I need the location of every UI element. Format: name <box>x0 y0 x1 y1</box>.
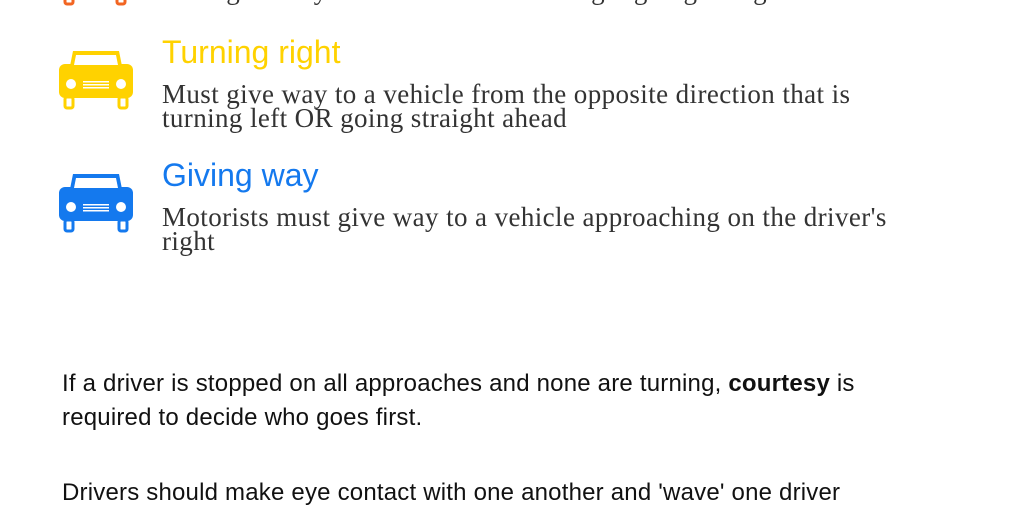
paragraph: courtesy: required to decide who goes first. <box>62 404 422 431</box>
paragraph: courtesy <box>62 370 855 431</box>
heading: Giving way <box>162 157 318 193</box>
icon: blue car <box>59 174 133 232</box>
heading: Turning right <box>162 34 340 70</box>
icon: yellow car <box>59 51 133 110</box>
item: giving way <box>59 157 887 256</box>
item: turning right <box>59 34 850 133</box>
paragraph: courtesy: If a driver is stopped on all approaches and none are turning, courtesy is <box>62 370 855 397</box>
paragraph: eye contact: Drivers should make eye contact with one another and 'wave' one driver <box>62 479 840 506</box>
description: Must give way to a vehicle from the opposite direction that is turning left OR going straight ahead <box>162 79 850 133</box>
icon: orange car wheels <box>64 0 126 6</box>
description: Motorists must give way to a vehicle approaching on the driver's right <box>162 202 887 256</box>
